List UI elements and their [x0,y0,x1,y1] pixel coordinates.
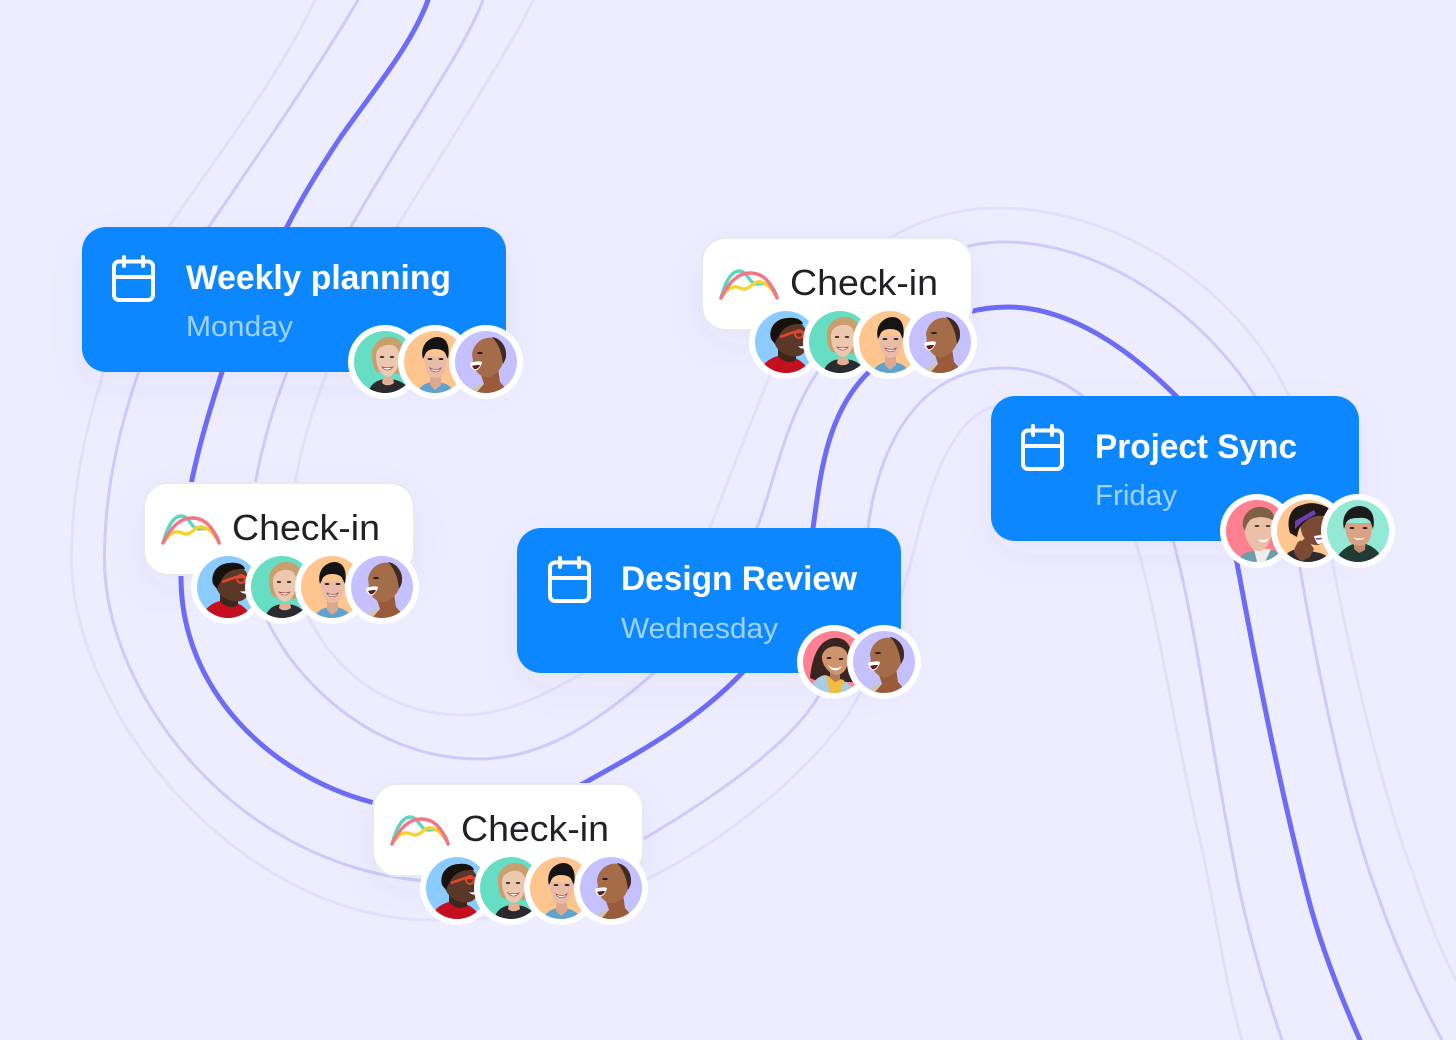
icon: calendar [550,558,589,601]
text: check-in: Check-in [790,262,938,303]
faint line B [290,0,1456,980]
panel: project sync [991,396,1395,568]
avatars: weekly planning [348,325,523,399]
avatars: check-in bottom [420,851,648,925]
panel: check-in left [144,483,419,624]
text: wednesday: Wednesday [621,613,779,645]
icon: check-in logo [721,271,777,298]
text: friday: Friday [1095,480,1178,512]
avatars: project sync [1220,494,1395,568]
text: monday: Monday [186,311,294,343]
panel: check-in bottom [373,784,648,925]
heading: project sync: Project Sync [1095,428,1297,466]
heading: design review: Design Review [621,560,858,598]
heading: weekly planning: Weekly planning [186,259,451,297]
icon: calendar [114,257,153,300]
text: check-in: Check-in [232,507,380,548]
avatars: check-in left [191,550,419,624]
panel: design review [517,528,921,699]
avatars: design review [797,625,921,699]
panel: check-in top [702,238,977,379]
text: check-in: Check-in [461,808,609,849]
panel: weekly planning [82,227,523,399]
icon: check-in logo [392,817,448,844]
icon: calendar [1023,426,1062,469]
avatars: check-in top [749,305,977,379]
icon: check-in logo [163,516,219,543]
